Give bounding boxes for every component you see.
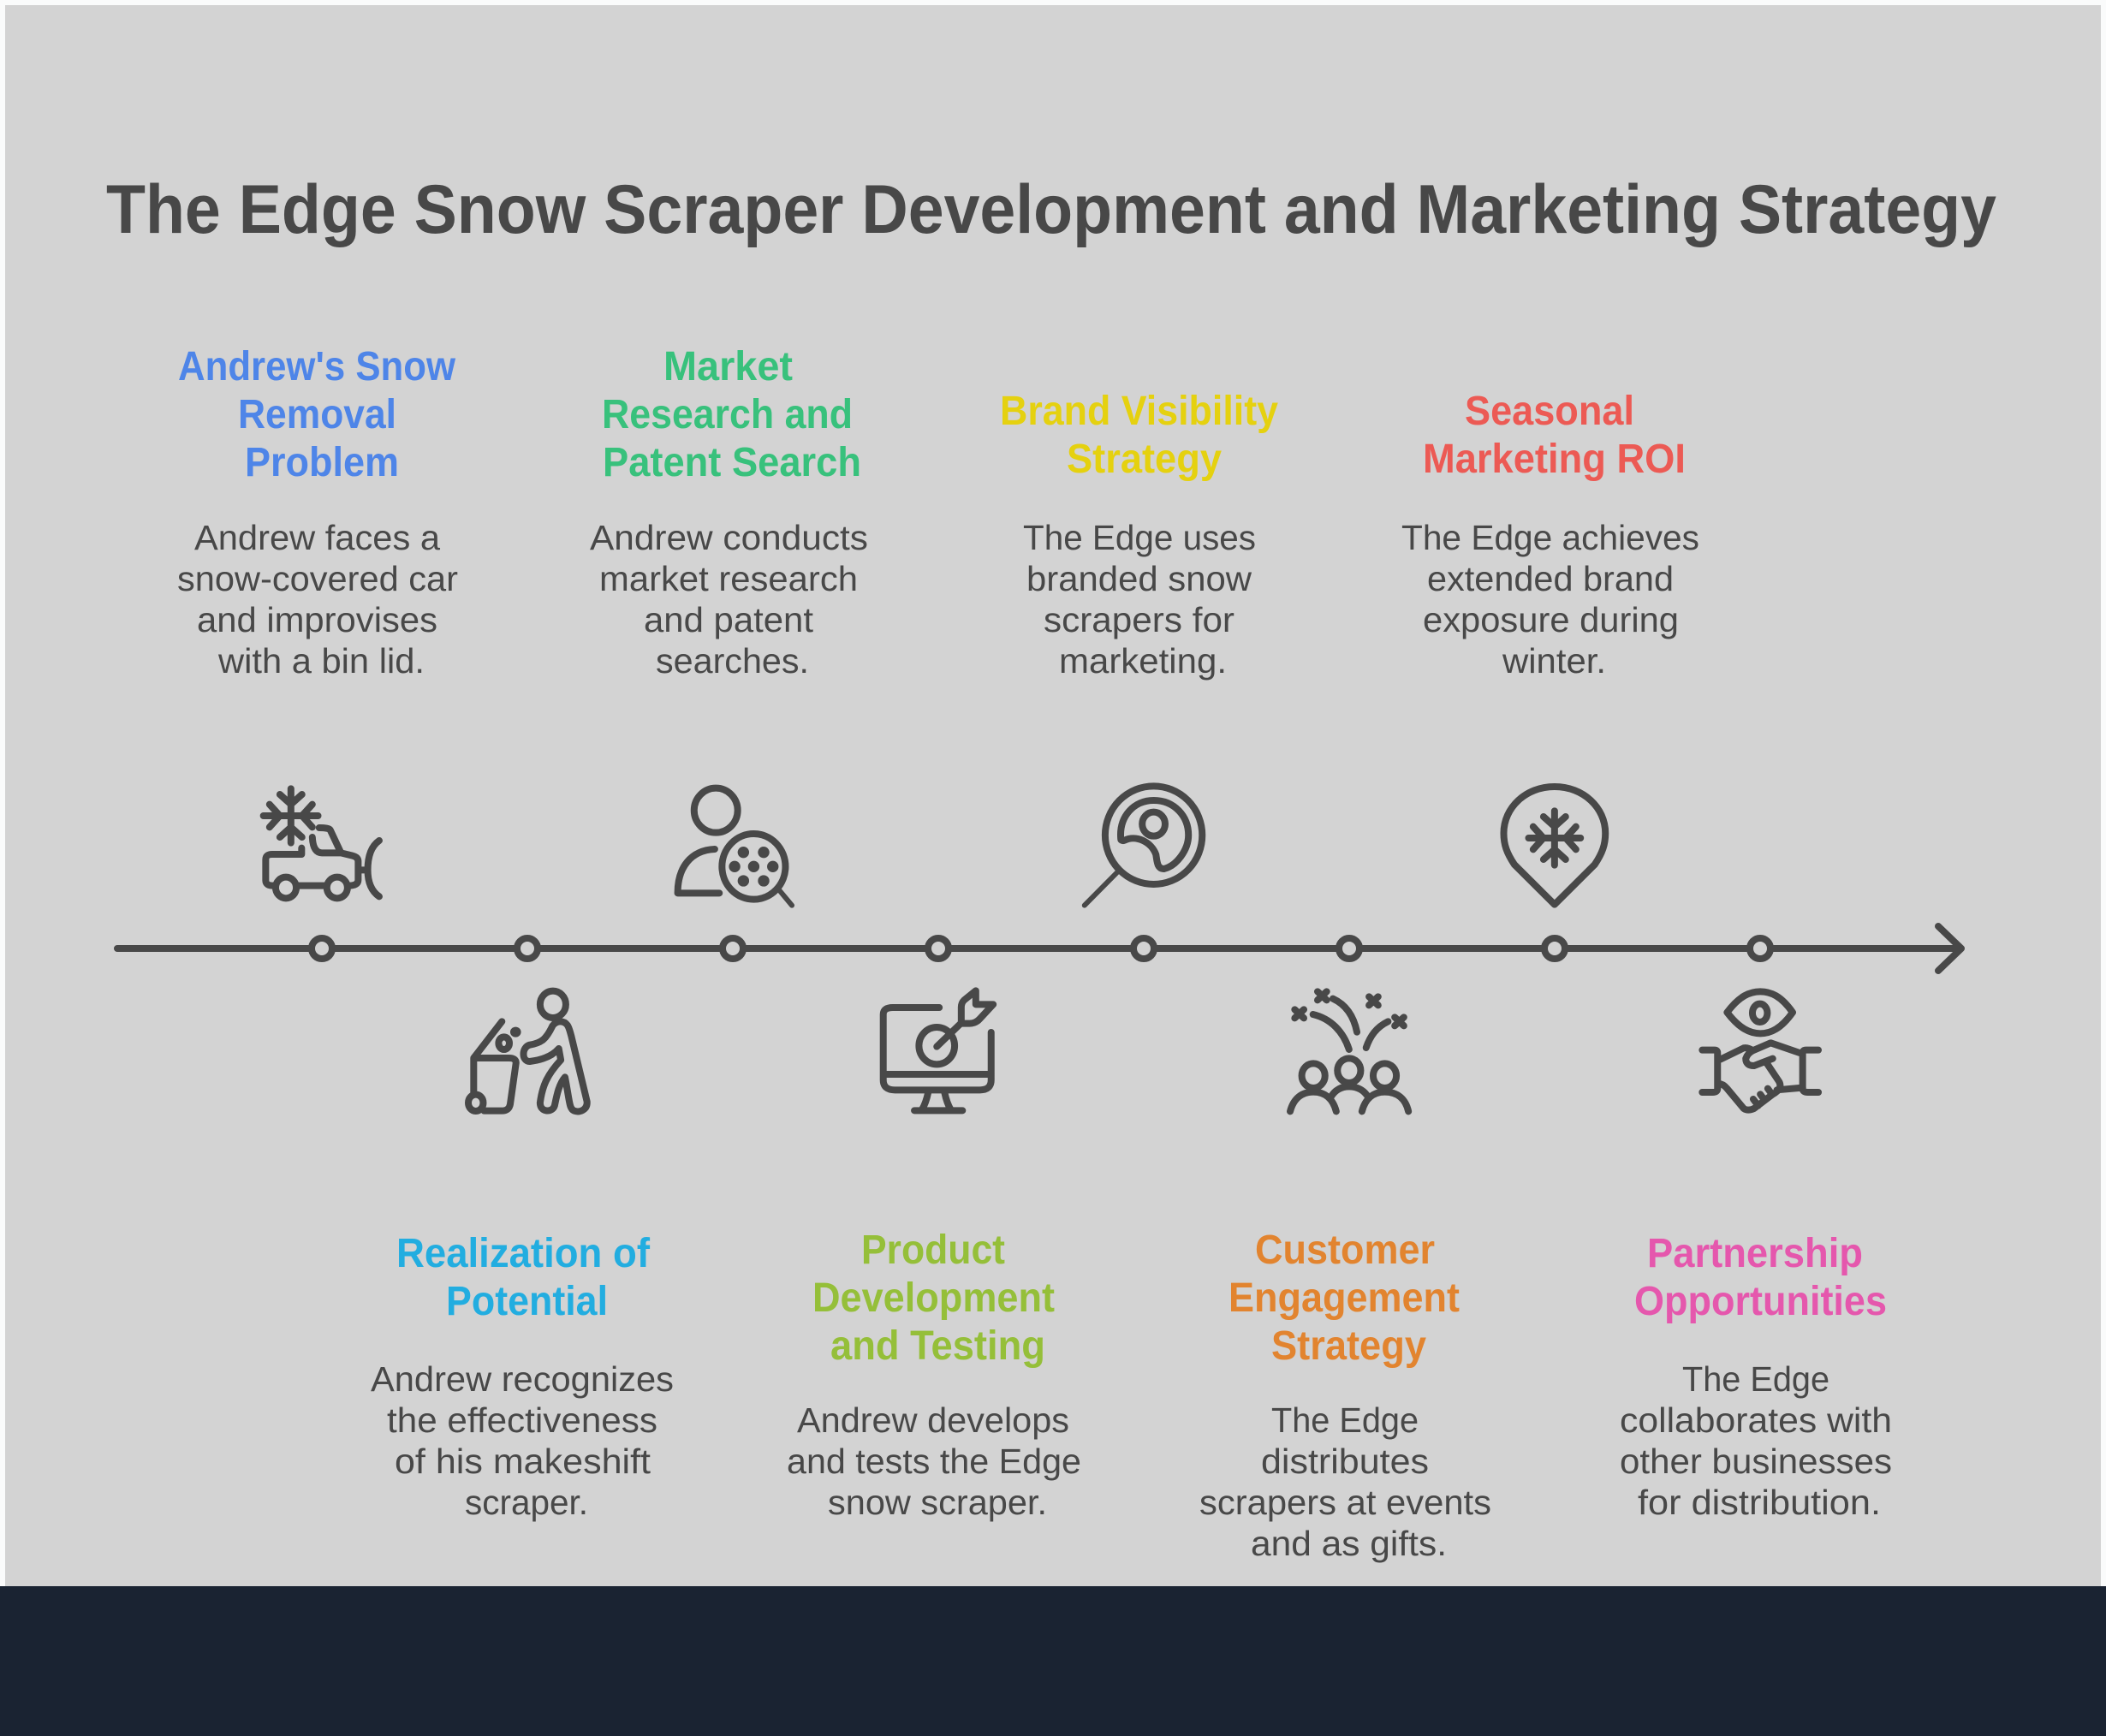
icon: crowd with fireworks — [1290, 991, 1408, 1111]
heading: Marketing ROI — [1423, 437, 1686, 482]
description: exposure during — [1423, 600, 1679, 639]
description: Andrew conducts — [590, 518, 868, 557]
description: with a bin lid. — [217, 641, 425, 681]
heading: Engagement — [1228, 1275, 1460, 1321]
heading: Research and — [602, 392, 853, 437]
heading: Customer — [1255, 1228, 1435, 1273]
description: Andrew recognizes — [371, 1359, 674, 1399]
description: The Edge uses — [1023, 518, 1256, 557]
description: collaborates with — [1620, 1400, 1892, 1440]
description: other businesses — [1620, 1442, 1892, 1481]
heading: Strategy — [1067, 437, 1222, 482]
heading: Potential — [446, 1279, 608, 1324]
step 2: Realization of Potential — [371, 991, 674, 1522]
heading — [1000, 389, 1278, 482]
description: of his makeshift — [395, 1442, 651, 1481]
description: market research — [599, 559, 858, 598]
description: scrapers for — [1044, 600, 1234, 639]
heading: Product — [861, 1228, 1005, 1273]
description: marketing. — [1059, 641, 1227, 681]
heading: Development — [812, 1275, 1055, 1321]
heading: Problem — [245, 440, 399, 485]
icon: eye above handshake — [1702, 991, 1818, 1110]
description: winter. — [1502, 641, 1606, 681]
heading: Brand Visibility — [1000, 389, 1278, 434]
icon: person at a bin — [468, 991, 587, 1111]
description: Andrew faces a — [194, 518, 440, 557]
description — [371, 1359, 674, 1522]
step 4: Product Development and Testing — [787, 990, 1081, 1522]
icon: person and magnifier — [678, 788, 792, 906]
description: The Edge — [1271, 1400, 1419, 1440]
description: and improvises — [197, 600, 437, 639]
icon: monitor with target and arrow — [883, 990, 993, 1110]
step 6: Customer Engagement Strategy — [1199, 991, 1491, 1563]
description — [1401, 518, 1699, 681]
step 3: Market Research and Patent Search — [590, 344, 868, 906]
description: and tests the Edge — [787, 1442, 1081, 1481]
heading: Opportunities — [1634, 1279, 1887, 1324]
heading: Market — [663, 344, 793, 389]
step 5: Brand Visibility Strategy — [1000, 389, 1278, 906]
description: for distribution. — [1638, 1483, 1881, 1522]
heading: Patent Search — [603, 440, 861, 485]
description — [1620, 1359, 1892, 1522]
heading: Realization of — [396, 1231, 651, 1276]
description: snow-covered car — [177, 559, 458, 598]
description: searches. — [656, 641, 809, 681]
step 7: Seasonal Marketing ROI — [1401, 389, 1699, 905]
description — [787, 1400, 1081, 1522]
description — [1023, 518, 1256, 681]
description: snow scraper. — [828, 1483, 1047, 1522]
description: scrapers at events — [1199, 1483, 1491, 1522]
icon: magnifier over map — [1085, 786, 1202, 906]
step 8: Partnership Opportunities — [1620, 991, 1892, 1522]
timeline with arrow and nodes — [117, 926, 1961, 971]
description — [590, 518, 868, 681]
heading: Partnership — [1647, 1231, 1863, 1276]
heading — [178, 344, 456, 485]
heading — [396, 1231, 651, 1324]
heading: and Testing — [830, 1323, 1045, 1369]
heading — [1634, 1231, 1887, 1324]
heading: Removal — [238, 392, 396, 437]
description: and patent — [644, 600, 814, 639]
title: The Edge Snow Scraper Development and Marketing Strategy — [106, 171, 1996, 248]
heading: Seasonal — [1465, 389, 1634, 434]
description: distributes — [1261, 1442, 1429, 1481]
heading — [812, 1228, 1055, 1369]
step 1: Andrew's Snow Removal Problem — [177, 344, 458, 898]
heading: Andrew's Snow — [178, 344, 456, 389]
description: Andrew develops — [797, 1400, 1069, 1440]
icon: snow plow truck with snowflake — [264, 788, 379, 898]
description: The Edge — [1682, 1359, 1829, 1399]
heading — [1423, 389, 1686, 482]
description: and as gifts. — [1251, 1524, 1447, 1563]
description: The Edge achieves — [1401, 518, 1699, 557]
footer band — [0, 1586, 2106, 1736]
description: the effectiveness — [387, 1400, 657, 1440]
description — [177, 518, 458, 681]
description: branded snow — [1026, 559, 1252, 598]
heading — [1228, 1228, 1460, 1369]
description — [1199, 1400, 1491, 1563]
heading — [602, 344, 861, 485]
description: scraper. — [465, 1483, 588, 1522]
description: extended brand — [1427, 559, 1674, 598]
icon: map pin with snowflake — [1503, 787, 1605, 905]
heading: Strategy — [1271, 1323, 1426, 1369]
